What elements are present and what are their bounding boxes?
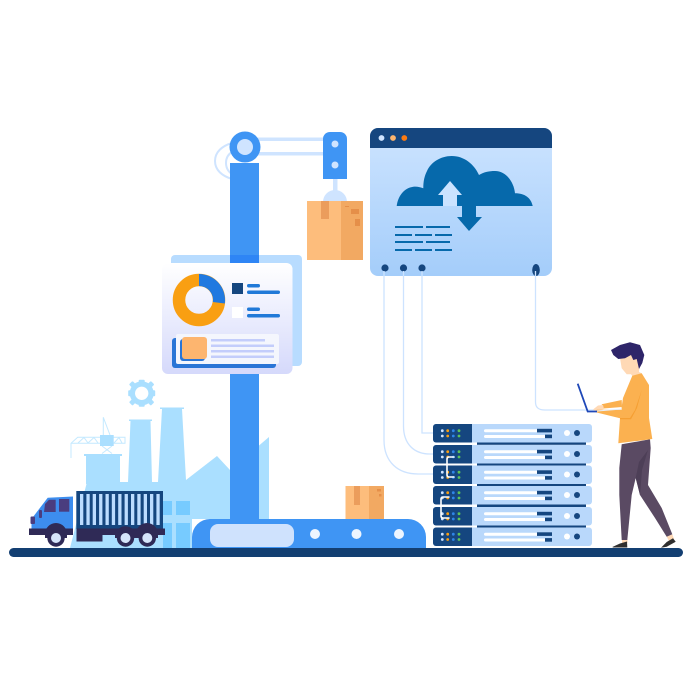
ankles (622, 534, 674, 543)
arm shading (620, 390, 642, 419)
gripper head (323, 132, 347, 179)
legend item one (232, 283, 280, 294)
factory silhouette (70, 408, 269, 548)
donut chart (179, 274, 225, 320)
icon: cloud (397, 156, 533, 206)
server rack (433, 424, 592, 546)
torso (618, 373, 652, 443)
icon: gear (128, 380, 155, 407)
factory windows (163, 501, 190, 548)
window buttons (379, 135, 407, 141)
icon: down arrow (457, 206, 482, 231)
text lines (395, 226, 452, 251)
box on conveyor (346, 486, 384, 519)
patch cables (441, 457, 454, 518)
shoes (612, 538, 676, 548)
trouser shading (636, 450, 648, 495)
cab windows (30, 499, 69, 524)
arm cable loops (215, 143, 235, 179)
container ribs (80, 494, 160, 525)
ports (381, 264, 540, 276)
hanging box (307, 201, 363, 260)
arm column (230, 163, 259, 521)
truck cab (32, 496, 73, 530)
conveyor panel (210, 524, 294, 547)
trousers (619, 439, 672, 540)
connection wires (384, 271, 597, 474)
construction crane (71, 417, 125, 458)
legend item two (232, 307, 280, 318)
rear arm (602, 400, 622, 408)
column overlap on card (230, 255, 259, 264)
dashboard card (162, 263, 292, 374)
dashboard card back (171, 255, 302, 366)
arm joint (230, 132, 260, 162)
delivery truck (29, 491, 165, 547)
wheels (47, 529, 156, 547)
chassis (29, 523, 165, 542)
icon: up arrow (438, 181, 462, 206)
rollers (310, 529, 404, 539)
conveyor belt (192, 519, 426, 549)
front arm (597, 385, 642, 418)
list card (172, 334, 279, 368)
gripper suction dome (323, 190, 347, 202)
gripper stem (333, 178, 338, 196)
ground bar (9, 548, 683, 557)
laptop (578, 384, 622, 412)
arm rails (245, 138, 327, 156)
hands (593, 405, 604, 412)
hair (611, 342, 644, 369)
neck and face (620, 350, 642, 377)
robot arm (215, 132, 347, 521)
window title bar (370, 128, 552, 148)
container (76, 491, 163, 529)
cloud browser window (370, 128, 552, 276)
person with laptop (578, 342, 676, 548)
